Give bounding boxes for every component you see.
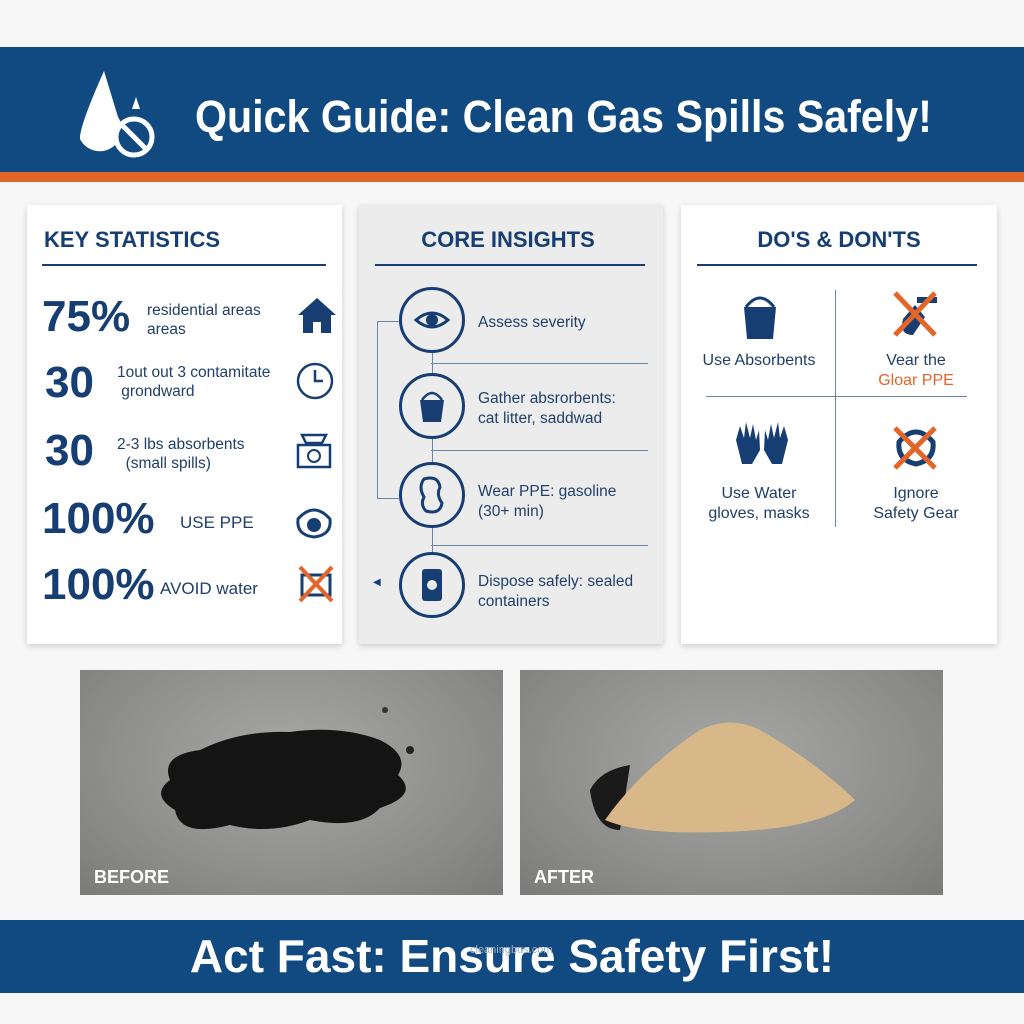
stat 100% avoid water: AVOID water	[160, 579, 258, 598]
header banner	[0, 47, 1024, 182]
stat 75%: 75%	[42, 292, 130, 341]
stat 75%: residential areas	[147, 302, 261, 319]
don't: ignore safety gear	[873, 426, 959, 522]
footer banner	[0, 920, 1024, 993]
icon: drop with no sign	[80, 71, 154, 158]
stat 30 absorbents: (small spills)	[126, 455, 211, 472]
text: ◀	[373, 577, 381, 588]
panel: core insights	[359, 205, 663, 644]
stat 100% avoid water: 100%	[42, 560, 155, 609]
stat 75%: areas	[147, 321, 186, 338]
stat 30 absorbents: 2-3 lbs absorbents	[117, 436, 245, 453]
stat 75%	[42, 292, 336, 341]
don't: wear the gloar ppe: Gloar PPE	[878, 372, 954, 389]
don't: wear the gloar ppe: Vear the	[886, 352, 946, 369]
heading: do's and don'ts: DO'S & DON'TS	[757, 227, 921, 252]
do: use absorbents: Use Absorbents	[703, 352, 815, 369]
step 1: Assess severity	[478, 314, 586, 331]
don't: ignore safety gear: Ignore	[893, 485, 939, 502]
do: gloves	[708, 422, 810, 522]
stat 30 absorbents	[45, 426, 332, 475]
stat 100% avoid water	[42, 560, 334, 609]
stat 30 absorbents: 30	[45, 426, 94, 475]
stat 30 groundwater	[45, 358, 334, 407]
step 3	[399, 462, 616, 528]
panel: do's and don'ts	[681, 205, 997, 644]
do: use absorbents	[703, 296, 815, 369]
stat 30 groundwater: grondward	[121, 383, 195, 400]
stat 100% PPE: USE PPE	[180, 513, 254, 532]
label: after: AFTER	[534, 867, 594, 887]
step 1	[399, 287, 586, 353]
step 3: Wear PPE: gasoline	[478, 483, 616, 500]
footer banner: Act Fast: Ensure Safety First!	[190, 930, 834, 982]
stat 100% PPE	[42, 494, 332, 543]
stat 30 groundwater: 1out out 3 contamitate	[117, 364, 270, 381]
photo: after	[520, 670, 943, 895]
do: gloves: Use Water	[722, 485, 796, 502]
step 2	[399, 373, 616, 439]
step 4: Dispose safely: sealed	[478, 573, 633, 590]
stat 100% PPE: 100%	[42, 494, 155, 543]
title: Quick Guide: Clean Gas Spills Safely!	[195, 91, 932, 142]
heading: core insights: CORE INSIGHTS	[421, 227, 595, 252]
don't: wear the gloar ppe	[878, 291, 954, 389]
label: before: BEFORE	[94, 867, 169, 887]
step 3: (30+ min)	[478, 503, 544, 520]
step 4	[399, 552, 633, 618]
step 4: containers	[478, 593, 550, 610]
step 2: cat litter, saddwad	[478, 410, 602, 427]
stat 30 groundwater: 30	[45, 358, 94, 407]
don't: ignore safety gear: Safety Gear	[873, 505, 959, 522]
panel: key statistics	[27, 205, 342, 644]
photo: before	[80, 670, 503, 895]
step 2: Gather absrorbents:	[478, 390, 616, 407]
heading: key statistics: KEY STATISTICS	[44, 227, 220, 252]
footer banner: cleaningbus.com	[470, 944, 553, 956]
do: gloves: gloves, masks	[708, 505, 810, 522]
